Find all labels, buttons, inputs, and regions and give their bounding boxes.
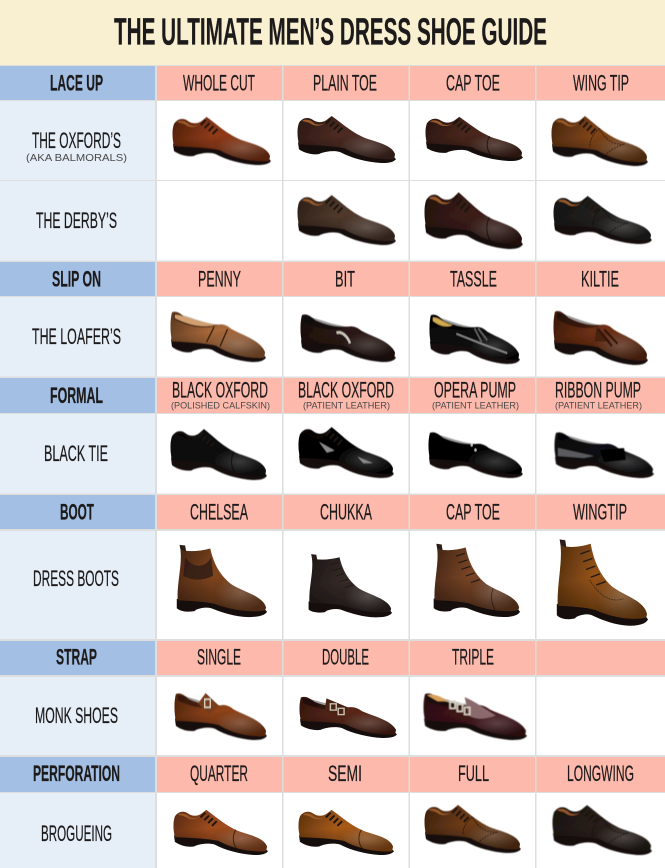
sublabel: patient leather 3: (PATIENT LEATHER) [555,400,642,410]
row: black tie [0,414,665,494]
label: brogueing: BROGUEING [41,821,112,846]
label: the loafers: THE LOAFER’S [32,324,121,349]
shoe: plain toe oxford [297,116,396,163]
shoe: wing tip oxford [551,116,648,166]
shoe: full brogue [424,805,521,853]
section: boot [0,495,665,529]
column: black oxford polished: BLACK OXFORD [172,378,268,402]
column: opera pump: OPERA PUMP [434,378,516,402]
column: triple: TRIPLE [452,644,494,670]
column: whole cut: WHOLE CUT [183,70,255,96]
column: full: FULL [458,761,489,786]
shoe: single monk [174,693,267,740]
shoe: chukka boot [309,554,392,617]
sublabel: polished calfskin: (POLISHED CALFSKIN) [171,400,270,410]
column: quarter: QUARTER [190,761,248,786]
shoe: wing tip derby [553,196,652,244]
column: kiltie: KILTIE [581,266,619,292]
row: brogueing [0,793,665,868]
column: cap toe: CAP TOE [446,70,500,96]
column: semi: SEMI [328,761,362,786]
sublabel: patient leather 2: (PATIENT LEATHER) [432,400,519,410]
section: lace up [0,66,665,100]
row: the derbys [0,181,665,260]
shoe: plain toe derby [297,195,396,245]
label: the derbys: THE DERBY’S [36,208,117,233]
column: chukka: CHUKKA [320,500,372,524]
shoe: wingtip boot [557,539,648,626]
shoe: ribbon pump [554,432,654,478]
column: penny: PENNY [198,266,241,292]
row: dress boots [0,531,665,639]
heading: perforation: PERFORATION [33,761,120,786]
row: monk shoes [0,677,665,755]
label: black tie: BLACK TIE [44,441,108,466]
heading: slip on: SLIP ON [52,266,101,292]
column: single: SINGLE [197,644,241,670]
shoe: semi brogue [298,810,394,855]
shoe: opera pump [428,432,523,478]
shoe: polished black oxford [170,429,267,480]
heading: lace up: LACE UP [50,70,103,96]
heading: strap: STRAP [56,644,97,670]
row: the loafers [0,297,665,376]
title banner [0,0,665,65]
column: double: DOUBLE [322,644,369,670]
section: formal [0,378,665,413]
sublabel: aka balmorals: (AKA BALMORALS) [26,153,127,164]
row: the oxfords [0,101,665,180]
shoe: double monk [299,697,397,738]
shoe: cap toe boot [434,544,520,617]
label: dress boots: DRESS BOOTS [33,566,119,591]
shoe: quarter brogue [173,810,268,855]
column: black oxford patent: BLACK OXFORD [298,378,394,402]
heading: formal: FORMAL [50,383,103,408]
sublabel: patient leather 1: (PATIENT LEATHER) [303,400,390,410]
section: strap [0,641,665,675]
shoe: whole cut oxford [172,117,271,165]
label: the oxfords: THE OXFORD’S [32,128,121,153]
shoe: bit loafer [300,315,396,362]
shoe: cap toe derby [424,192,523,249]
column: tassle: TASSLE [450,266,497,292]
column: plain toe: PLAIN TOE [313,70,377,96]
shoe: longwing brogue [552,805,652,855]
column: wingtip boot: WINGTIP [573,500,627,524]
shoe: kiltie loafer [553,311,648,365]
label: monk shoes: MONK SHOES [35,703,118,728]
shoe: patent black oxford [298,427,394,478]
shoe: tassel loafer [429,315,520,364]
column: bit: BIT [335,266,355,292]
heading: boot: BOOT [60,500,94,524]
column: cap toe boot: CAP TOE [446,500,500,524]
shoe: triple monk [424,693,527,740]
shoe: chelsea boot [177,545,267,617]
section: slip on [0,262,665,296]
column: chelsea: CHELSEA [190,500,248,524]
section: perforation [0,757,665,792]
shoe: cap toe oxford [425,117,523,161]
shoe: penny loafer [170,312,266,362]
